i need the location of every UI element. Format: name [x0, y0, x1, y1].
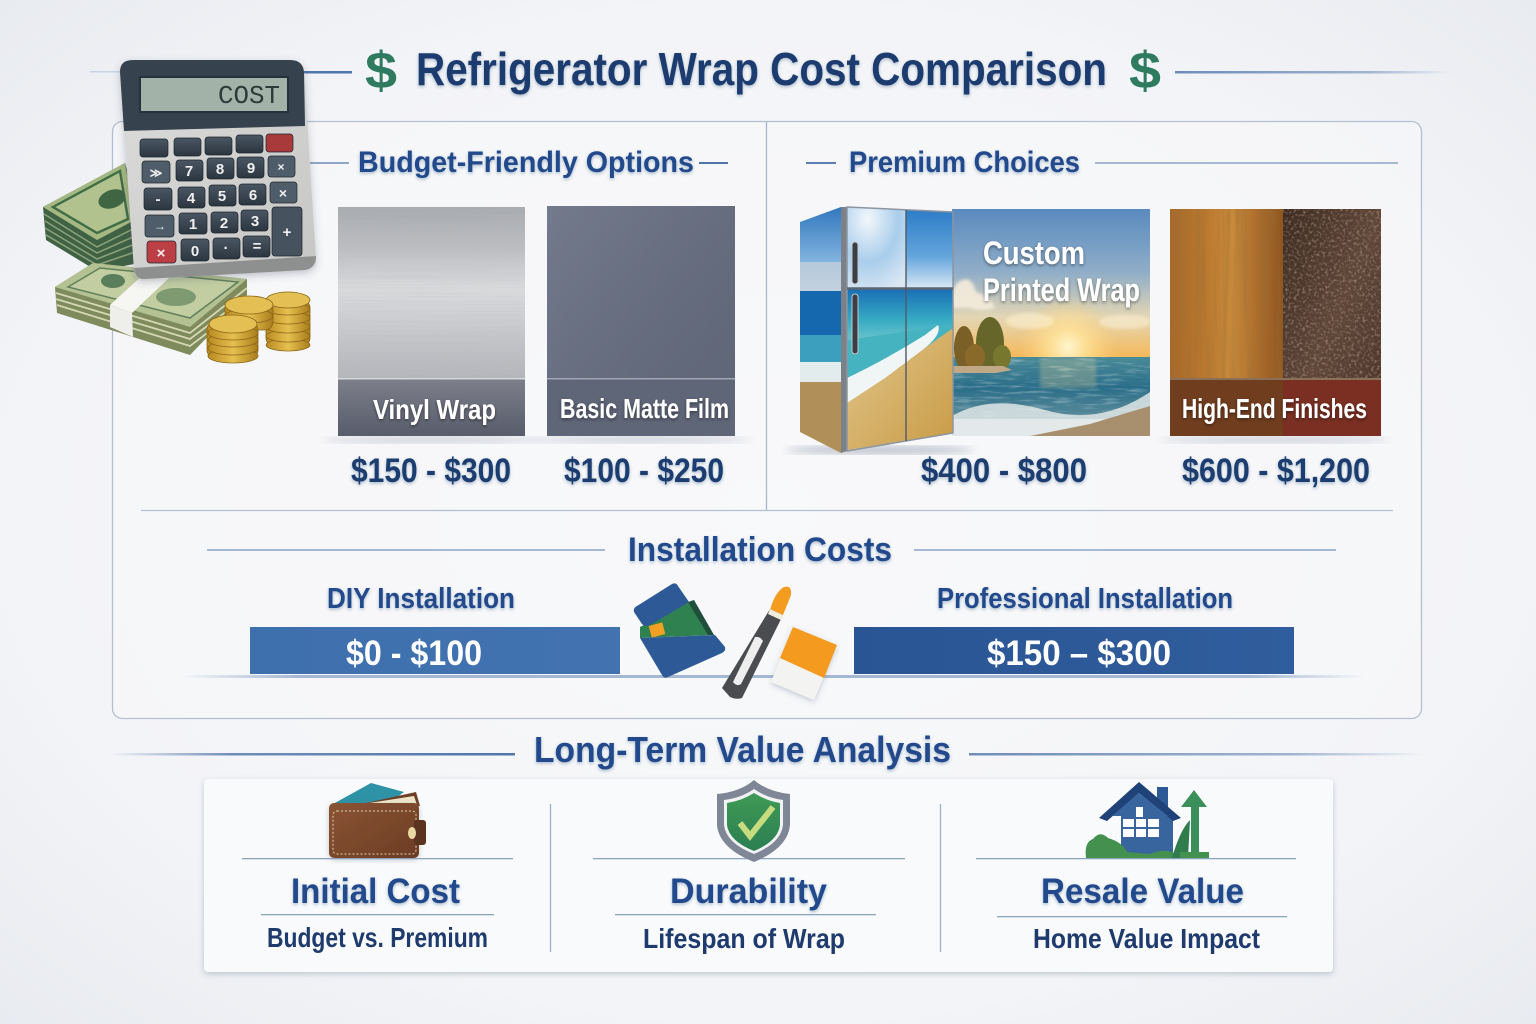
- calculator keys: [140, 134, 302, 263]
- price: vinyl wrap: $150 - $300: [351, 452, 511, 490]
- calculator key labels: =: [253, 238, 262, 255]
- column: durability: [593, 780, 905, 954]
- calculator key labels: [150, 160, 292, 262]
- bar: diy price: $0 - $100: [346, 634, 482, 673]
- column: resale value: [976, 782, 1296, 954]
- label: Custom: [983, 235, 1085, 271]
- calculator key labels: ×: [279, 185, 287, 201]
- icon: wallet: [329, 783, 426, 858]
- label: High-End Finishes: [1182, 393, 1367, 424]
- calculator key labels: 2: [220, 215, 228, 232]
- baseline glow under installation bars: [180, 675, 1365, 678]
- bar: diy price: [250, 627, 620, 674]
- card: high-end finishes: [1160, 209, 1390, 443]
- calculator key labels: 5: [218, 188, 226, 205]
- calculator key labels: 0: [191, 243, 199, 260]
- icon: shield: [717, 780, 790, 862]
- label: Basic Matte Film: [560, 393, 729, 424]
- calculator key labels: 6: [249, 187, 257, 204]
- diy installation: DIY Installation: [327, 583, 515, 615]
- title: Refrigerator Wrap Cost Comparison: [416, 43, 1107, 95]
- professional installation: [854, 583, 1294, 674]
- calculator key labels: ×: [277, 160, 285, 174]
- column: initial cost: Budget vs. Premium: [267, 922, 488, 953]
- heading: budget-friendly options: Budget-Friendly Options: [358, 146, 694, 179]
- bar: professional price: $150 – $300: [987, 634, 1171, 673]
- calculator key labels: ≫: [150, 166, 162, 180]
- calculator key labels: 7: [185, 163, 193, 180]
- title: [90, 42, 1450, 100]
- column: durability: Lifespan of Wrap: [643, 923, 845, 954]
- calculator key labels: ×: [157, 245, 166, 262]
- label: Vinyl Wrap: [373, 394, 496, 425]
- column: initial cost: [242, 783, 513, 953]
- icon: knife tool: [722, 587, 791, 699]
- diy installation: [250, 583, 620, 674]
- calculator key labels: 1: [189, 216, 197, 233]
- icon: squeegee block: [771, 627, 837, 700]
- calculator key labels: -: [156, 191, 160, 208]
- heading: installation costs: Installation Costs: [628, 531, 892, 569]
- calculator key labels: ·: [224, 240, 228, 257]
- calculator key labels: 3: [251, 213, 259, 230]
- icon: installation tools: [634, 583, 837, 700]
- price: custom printed wrap: $400 - $800: [921, 452, 1087, 490]
- column: durability: Durability: [670, 872, 828, 911]
- title: $: [365, 42, 397, 100]
- trees: [954, 326, 974, 370]
- panel: long-term value: [204, 779, 1333, 972]
- calculator key labels: 4: [187, 190, 196, 207]
- card: custom printed wrap: Printed Wrap: [983, 272, 1140, 308]
- calculator key labels: +: [283, 224, 292, 241]
- heading: premium choices: Premium Choices: [849, 146, 1080, 179]
- column: resale value: Resale Value: [1041, 872, 1244, 911]
- panel: cost comparison frame: [112, 122, 1422, 718]
- icon: calculator and money: [43, 60, 316, 363]
- icon: gold coins: [207, 292, 310, 363]
- icon: money stack back: [43, 163, 145, 271]
- price: basic matte film: $100 - $250: [564, 452, 724, 490]
- column: resale value: Home Value Impact: [1033, 923, 1260, 954]
- icon: calculator: [120, 60, 316, 279]
- card: basic matte film: [531, 206, 751, 443]
- icon: money stack front: [55, 263, 247, 355]
- icon: calculator: COST: [218, 81, 280, 111]
- professional installation: Professional Installation: [937, 583, 1233, 615]
- icon: house with growth arrow: [1086, 782, 1209, 858]
- card: custom printed wrap: [952, 209, 1151, 436]
- title: $: [1129, 42, 1161, 100]
- column: initial cost: Initial Cost: [291, 872, 460, 911]
- icon: wrapped refrigerator: [785, 205, 975, 457]
- calculator key labels: →: [154, 219, 166, 233]
- card: vinyl wrap: [322, 207, 542, 443]
- calculator key labels: 8: [216, 161, 224, 178]
- heading: long-term value analysis: Long-Term Value Analysis: [534, 729, 951, 770]
- bar: professional price: [854, 627, 1294, 674]
- icon: wallet: [634, 583, 725, 678]
- price: high-end finishes: $600 - $1,200: [1182, 452, 1370, 490]
- calculator key labels: 9: [247, 160, 255, 177]
